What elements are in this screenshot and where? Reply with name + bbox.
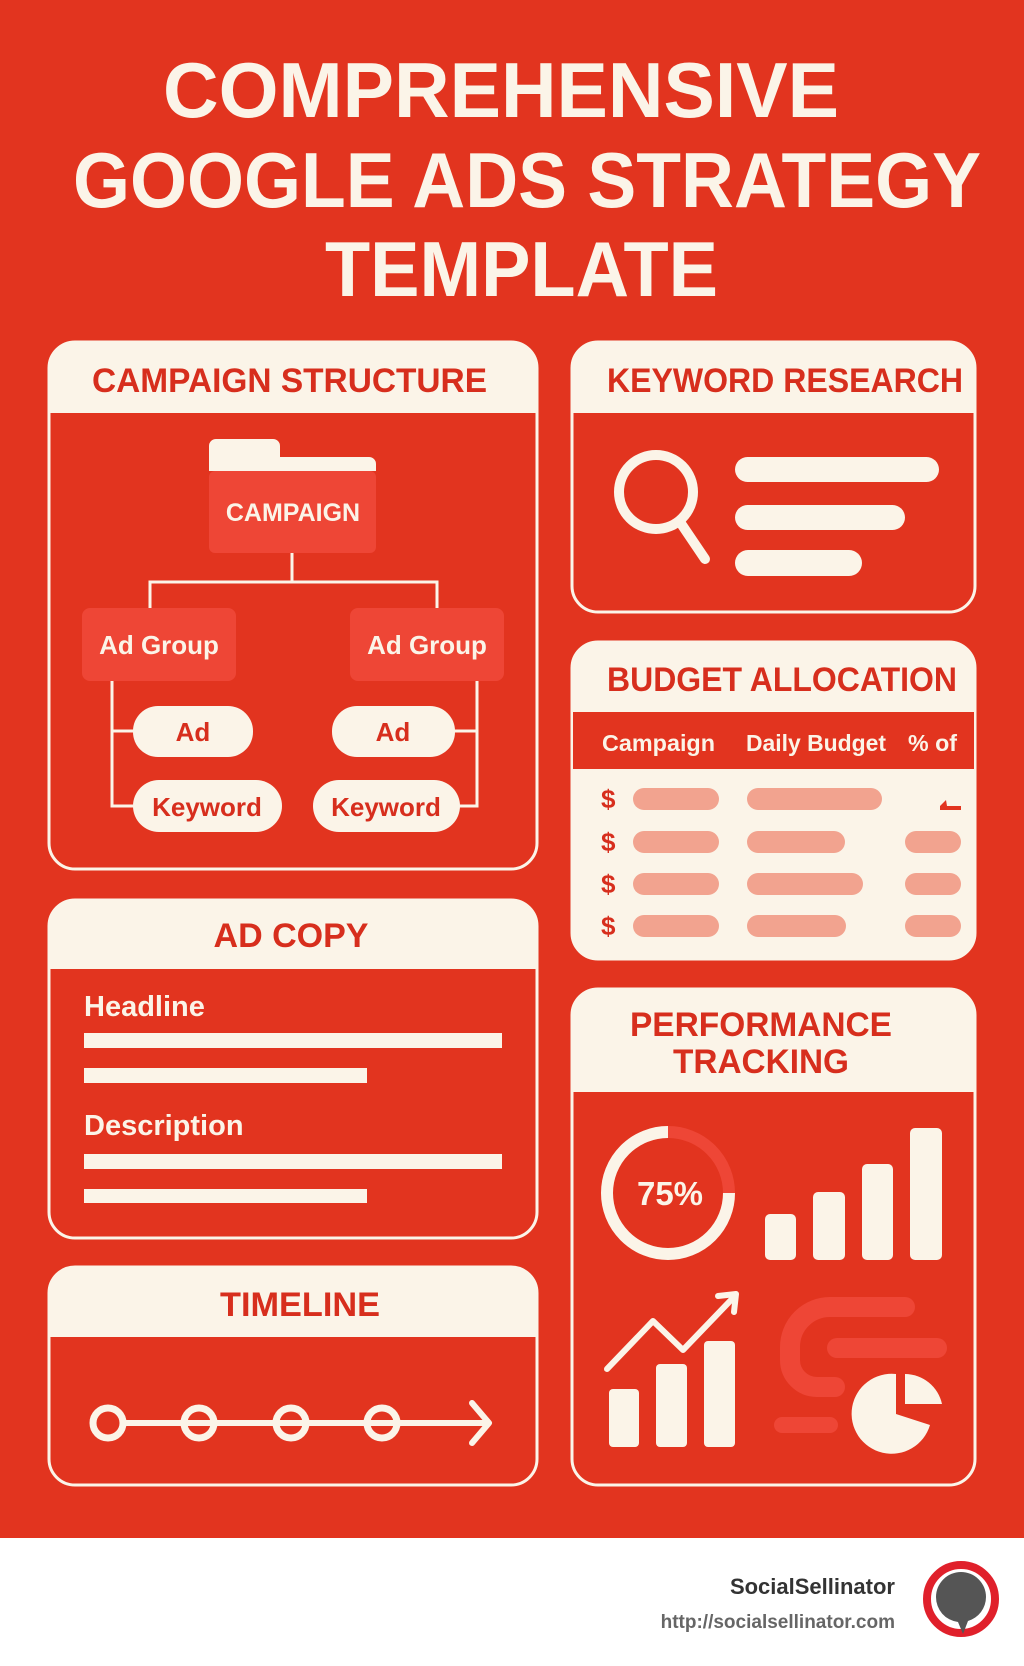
bar chart	[765, 1128, 942, 1260]
table header row: Campaign	[602, 730, 715, 756]
panel: budget allocation	[572, 642, 975, 959]
pie chart	[852, 1374, 942, 1454]
heading: keyword research: KEYWORD RESEARCH	[607, 362, 963, 400]
ad group left	[82, 608, 236, 681]
heading: ad copy: AD COPY	[214, 917, 369, 955]
icon: magnifier	[619, 455, 705, 559]
table rows: $	[601, 869, 616, 899]
pill: keyword left: Keyword	[152, 792, 262, 822]
panel: timeline	[49, 1267, 537, 1485]
gauge 75%: 75%	[637, 1175, 703, 1212]
title: GOOGLE ADS STRATEGY	[73, 136, 981, 224]
pill: keyword right	[313, 780, 460, 832]
pill: keyword left	[133, 780, 282, 832]
icon: logo	[927, 1565, 995, 1634]
table rows	[601, 784, 961, 941]
gauge 75%	[607, 1132, 729, 1254]
faint background shapes	[782, 1307, 937, 1425]
table rows: $	[601, 784, 616, 814]
table rows: $	[601, 911, 616, 941]
tree connectors	[112, 553, 477, 806]
pill: ad left	[133, 706, 253, 757]
table header row	[573, 712, 974, 769]
heading: performance tracking: PERFORMANCE	[630, 1006, 892, 1044]
keyword lines	[735, 457, 939, 576]
icon: campaign folder: CAMPAIGN	[226, 499, 360, 527]
heading: performance tracking: TRACKING	[673, 1043, 849, 1081]
title: COMPREHENSIVE	[163, 46, 839, 134]
footer brand: http://socialsellinator.com	[661, 1612, 895, 1633]
title: TEMPLATE	[325, 225, 718, 313]
icon: campaign folder	[209, 439, 376, 553]
heading: budget allocation: BUDGET ALLOCATION	[607, 661, 957, 699]
ad group left: Ad Group	[99, 630, 219, 660]
table rows: $	[601, 827, 616, 857]
title	[73, 46, 981, 313]
panel: performance tracking	[572, 989, 975, 1485]
table header row: Daily Budget	[746, 730, 886, 756]
footer brand	[661, 1574, 895, 1633]
heading: performance tracking	[630, 1006, 892, 1081]
footer brand: SocialSellinator	[730, 1574, 895, 1599]
trend chart	[607, 1294, 736, 1447]
heading: campaign structure: CAMPAIGN STRUCTURE	[92, 362, 487, 400]
pill: ad right	[332, 706, 455, 757]
pill: ad right: Ad	[376, 717, 410, 747]
timeline arrow	[93, 1403, 489, 1443]
headline lines	[84, 1033, 502, 1083]
ad group right	[350, 608, 504, 681]
description lines	[84, 1154, 502, 1203]
pill: keyword right: Keyword	[331, 792, 441, 822]
panel: campaign structure	[49, 342, 537, 869]
label: description: Description	[84, 1110, 244, 1142]
label: headline: Headline	[84, 991, 205, 1023]
panel: ad copy	[49, 900, 537, 1238]
pill: ad left: Ad	[176, 717, 210, 747]
table header row: % of	[908, 730, 957, 756]
panel: keyword research	[572, 342, 975, 612]
heading: timeline: TIMELINE	[220, 1286, 380, 1324]
ad group right: Ad Group	[367, 630, 487, 660]
